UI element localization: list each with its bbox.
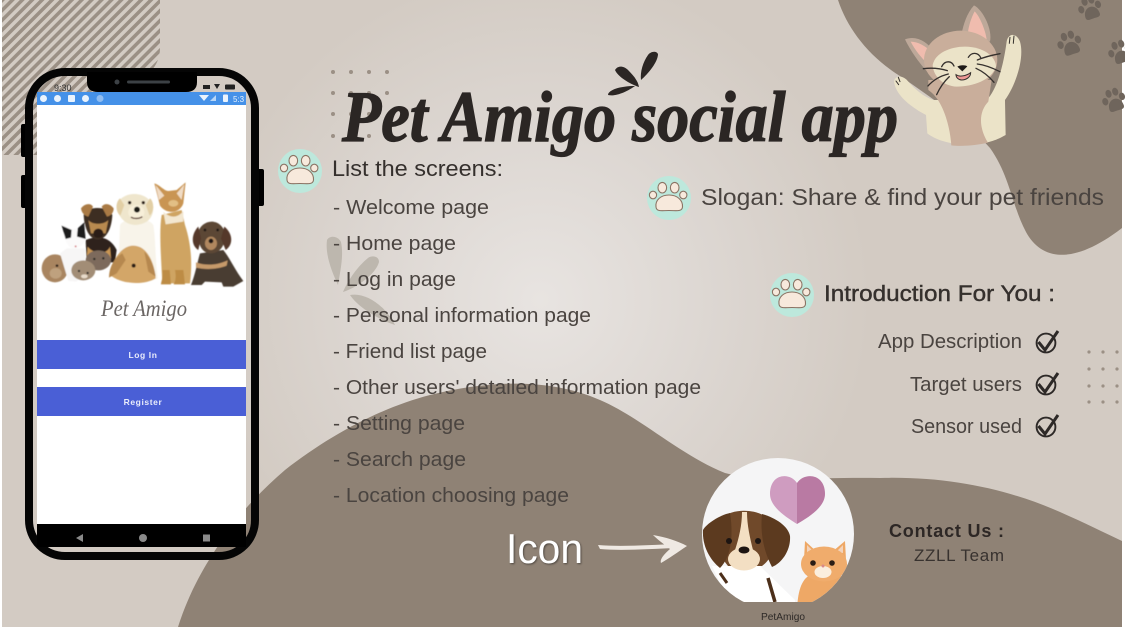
bottom brown blob [178, 384, 1122, 627]
cat mascot [894, 5, 1021, 146]
icon: paw [770, 273, 814, 317]
slogan text: Slogan: Share & find your pet friends [701, 184, 1104, 210]
dog [702, 510, 795, 602]
checklist item: target users: Target users [910, 374, 1022, 396]
dachshund [191, 222, 243, 287]
phone logo: Pet Amigo [100, 296, 187, 321]
navigation bar [37, 524, 246, 547]
screens list: - Personal information page [333, 305, 591, 327]
contact heading: Contact Us : [889, 521, 1004, 541]
faint leaf decoration [327, 237, 395, 325]
striped panel [2, 0, 160, 155]
abyssinian cat [154, 182, 191, 284]
title: Pet Amigo social app [341, 77, 898, 157]
status bar: 5:3 [233, 95, 245, 104]
paw prints decoration [1054, 0, 1125, 114]
label: icon: Icon [506, 525, 583, 572]
dots top-left [331, 70, 389, 138]
introduction heading: Introduction For You : [824, 281, 1055, 306]
screens list: - Welcome page [333, 197, 489, 219]
pets photo [42, 182, 243, 287]
checklist item: app description: App Description [878, 331, 1022, 353]
shepherd puppy [81, 204, 117, 262]
phone screen [37, 92, 246, 547]
checklist item: sensor used: Sensor used [911, 416, 1022, 438]
phone mockup [21, 72, 264, 556]
screens list [333, 197, 701, 507]
kittens [71, 250, 111, 280]
rabbit [109, 246, 156, 283]
screens list: - Home page [333, 233, 456, 255]
contact block [889, 521, 1004, 565]
top-right brown blob [838, 0, 1122, 255]
screens list: - Log in page [333, 269, 456, 291]
cat [798, 541, 847, 602]
screens list: - Other users' detailed information page [333, 377, 701, 399]
screens list: - Friend list page [333, 341, 487, 363]
screens list: - Location choosing page [333, 485, 569, 507]
phone signal icons [203, 84, 235, 90]
screens list: - Setting page [333, 413, 465, 435]
team name: ZZLL Team [914, 546, 1004, 565]
arrow to app icon [598, 535, 687, 563]
screens heading group [278, 149, 503, 193]
phone side buttons [21, 124, 264, 208]
kitten black and white [60, 222, 86, 282]
introduction section [770, 273, 1058, 438]
register button [37, 387, 246, 416]
slogan [647, 176, 1104, 220]
icon: paw [278, 149, 322, 193]
screens list: - Search page [333, 449, 466, 471]
heading: list the screens: List the screens: [332, 156, 503, 181]
guinea pig [42, 254, 68, 282]
log in button: Log In [128, 350, 158, 360]
dots right [1087, 350, 1119, 404]
register button: Register [124, 397, 162, 407]
phone clock: 9:30 [54, 83, 72, 93]
splash above title [608, 52, 658, 95]
heart [770, 476, 825, 524]
app icon caption: PetAmigo [761, 611, 805, 623]
log in button [37, 340, 246, 369]
notch [87, 72, 197, 92]
phone frame [29, 72, 255, 556]
app icon [702, 458, 854, 602]
icon: paw [647, 176, 691, 220]
labrador puppy [117, 194, 158, 282]
icon bottom crop [700, 602, 860, 616]
status bar [37, 92, 246, 105]
